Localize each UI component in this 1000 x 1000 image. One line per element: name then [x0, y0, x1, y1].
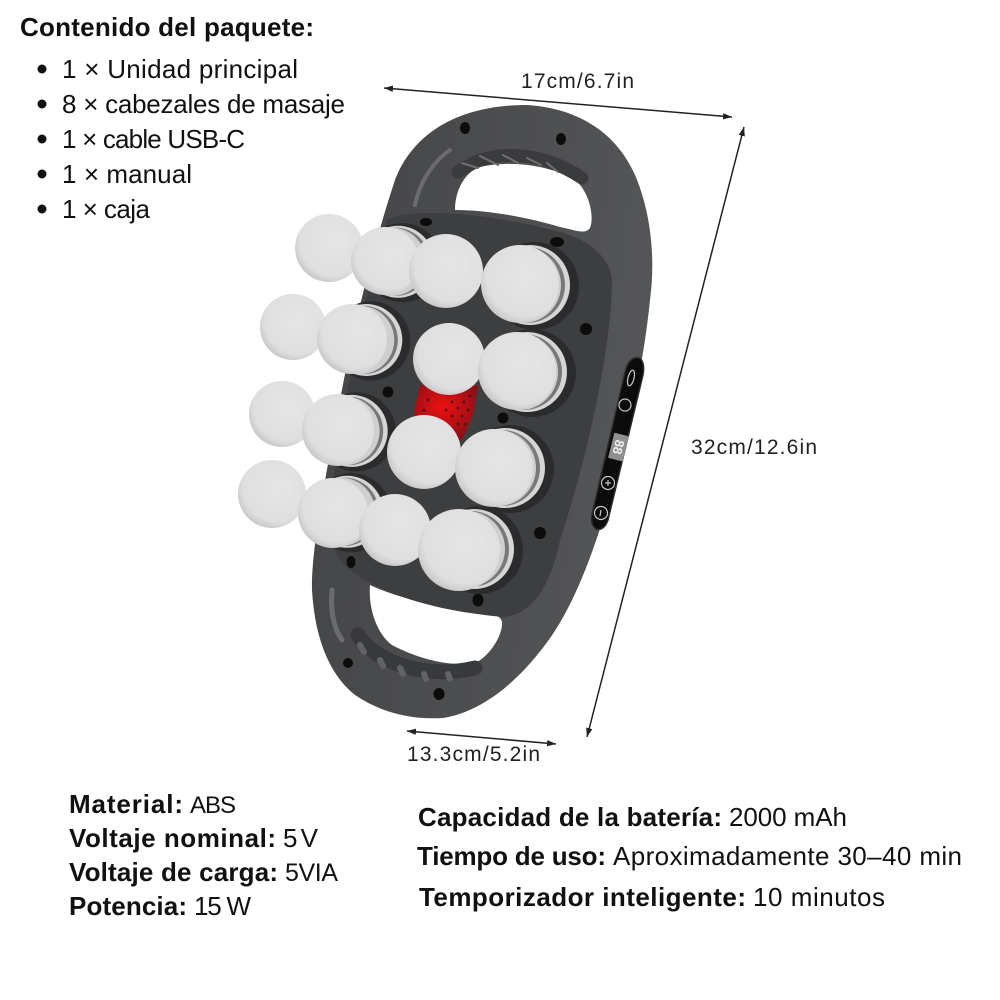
specs right column: Tiempo de uso:	[417, 841, 606, 871]
screws	[343, 122, 592, 700]
far row balls	[295, 214, 363, 282]
specs left column: Voltaje de carga:	[69, 857, 278, 887]
package contents list	[38, 54, 345, 224]
specs right column: Aproximadamente 30–40 min	[613, 841, 962, 871]
package contents heading: Contenido del paquete:	[20, 12, 314, 42]
dimension: width top: 17cm/6.7in	[521, 70, 634, 93]
dimension: height right: 32cm/12.6in	[691, 436, 817, 459]
specs left column: Material:	[69, 789, 183, 819]
specs left column: 5 V	[283, 823, 319, 853]
control panel: 88	[609, 438, 628, 456]
fourth row heads	[485, 242, 579, 330]
package contents list: 8 × cabezales de masaje	[62, 89, 345, 119]
specs left column: 5VIA	[285, 859, 338, 887]
specs right column: 2000 mAh	[729, 802, 847, 832]
device body with handles	[312, 105, 652, 718]
top handle grip	[415, 150, 582, 205]
specs left column: ABS	[190, 792, 236, 819]
bottom handle grip	[332, 590, 475, 679]
specs left column: 15 W	[194, 891, 251, 921]
specs right column	[417, 802, 962, 912]
dimension: width bottom: 13.3cm/5.2in	[407, 743, 540, 766]
package contents list: 1 × manual	[62, 159, 192, 189]
package contents list: 1 × cable USB-C	[62, 124, 245, 154]
dimension: width top	[384, 70, 732, 117]
specs left column: Potencia:	[69, 891, 187, 921]
specs right column: 10 minutos	[753, 882, 885, 912]
second row heads	[358, 223, 442, 302]
massager device	[238, 105, 652, 718]
specs left column	[69, 789, 338, 921]
dimension: height right	[587, 127, 817, 737]
control panel	[592, 358, 644, 529]
package contents list: 1 × Unidad principal	[62, 54, 298, 84]
red heat panel	[414, 385, 478, 440]
dimension: width bottom	[407, 731, 556, 766]
display	[608, 433, 629, 462]
massage heads	[238, 214, 579, 594]
inner panel	[330, 213, 612, 617]
package contents list: 1 × caja	[62, 194, 151, 224]
specs right column: Capacidad de la batería:	[418, 802, 722, 832]
third row balls	[409, 234, 483, 308]
specs left column: Voltaje nominal:	[69, 823, 276, 853]
specs right column: Temporizador inteligente:	[419, 882, 746, 912]
